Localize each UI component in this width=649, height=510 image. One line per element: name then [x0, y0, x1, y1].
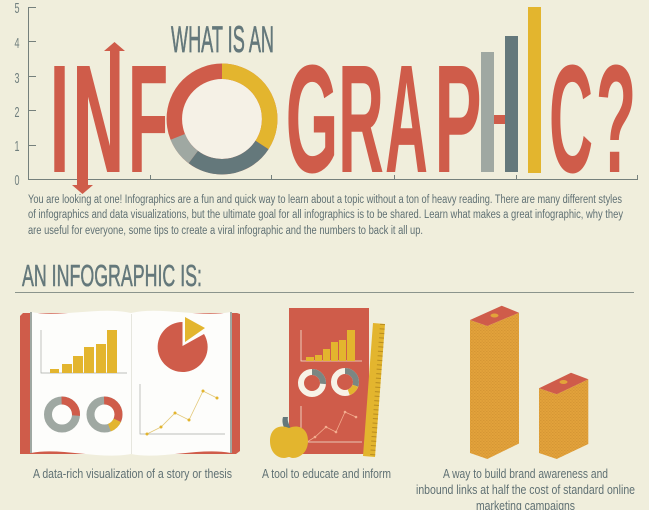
- sheet donut charts: [301, 371, 356, 394]
- small stack: [539, 373, 588, 459]
- title: infographic letters with chart elements: F: [128, 34, 168, 206]
- caption: brand awareness: [416, 466, 635, 510]
- title: infographic letters with chart elements: A: [385, 32, 428, 205]
- intro paragraph: are useful for everyone, some tips to create a viral infographic and the numbers to back it all up.: [28, 225, 423, 237]
- title: infographic letters with chart elements: N: [73, 34, 124, 206]
- book pages: [31, 311, 231, 456]
- illustration: open book: [20, 311, 240, 456]
- intro paragraph: [28, 194, 623, 237]
- caption: tool: A tool to educate and inform: [262, 466, 391, 481]
- chart axes with scale numbers: 3: [14, 70, 20, 87]
- chart axes with scale numbers: 0: [14, 172, 20, 189]
- caption: book: A data-rich visualization of a story or thesis: [33, 466, 232, 481]
- donut charts: [48, 400, 118, 428]
- donut chart as letter O: [174, 71, 270, 167]
- sheet line chart: [301, 406, 362, 442]
- title: infographic letters with chart elements: R: [338, 32, 384, 205]
- sheet bar chart: [301, 330, 362, 361]
- pie chart: [158, 317, 208, 372]
- red sheet: [289, 308, 369, 454]
- illustration: stacks of money: [470, 306, 588, 459]
- large stack: [470, 306, 519, 459]
- arrow: up from N: [104, 42, 125, 172]
- text: WHAT IS AN: [171, 19, 274, 60]
- arrow: down from N: [72, 66, 93, 194]
- section heading: AN INFOGRAPHIC IS:: [22, 258, 202, 293]
- chart axes with scale numbers: 1: [14, 138, 20, 155]
- chart axes with scale numbers: 4: [14, 35, 20, 52]
- bar chart: [41, 330, 127, 373]
- chart axes with scale numbers: 5: [14, 0, 20, 17]
- line chart: [140, 384, 225, 436]
- title: infographic letters with chart elements: P: [434, 33, 482, 205]
- title: infographic letters with chart elements: [49, 7, 636, 206]
- title: infographic letters with chart elements: I: [49, 34, 70, 205]
- book cover: [20, 313, 240, 454]
- chart axes with scale numbers: [14, 0, 638, 189]
- caption: brand awareness: A way to build brand awareness and: [443, 466, 608, 481]
- bar chart as letters H and I: [481, 7, 541, 173]
- title: infographic letters with chart elements: C: [549, 33, 593, 205]
- chart axes with scale numbers: 2: [14, 104, 20, 121]
- ruler: [363, 323, 385, 457]
- title: infographic letters with chart elements: ?: [596, 34, 636, 206]
- title: infographic letters with chart elements: G: [286, 33, 338, 206]
- apple: [270, 417, 308, 458]
- illustration: paper, ruler and apple: [270, 308, 385, 458]
